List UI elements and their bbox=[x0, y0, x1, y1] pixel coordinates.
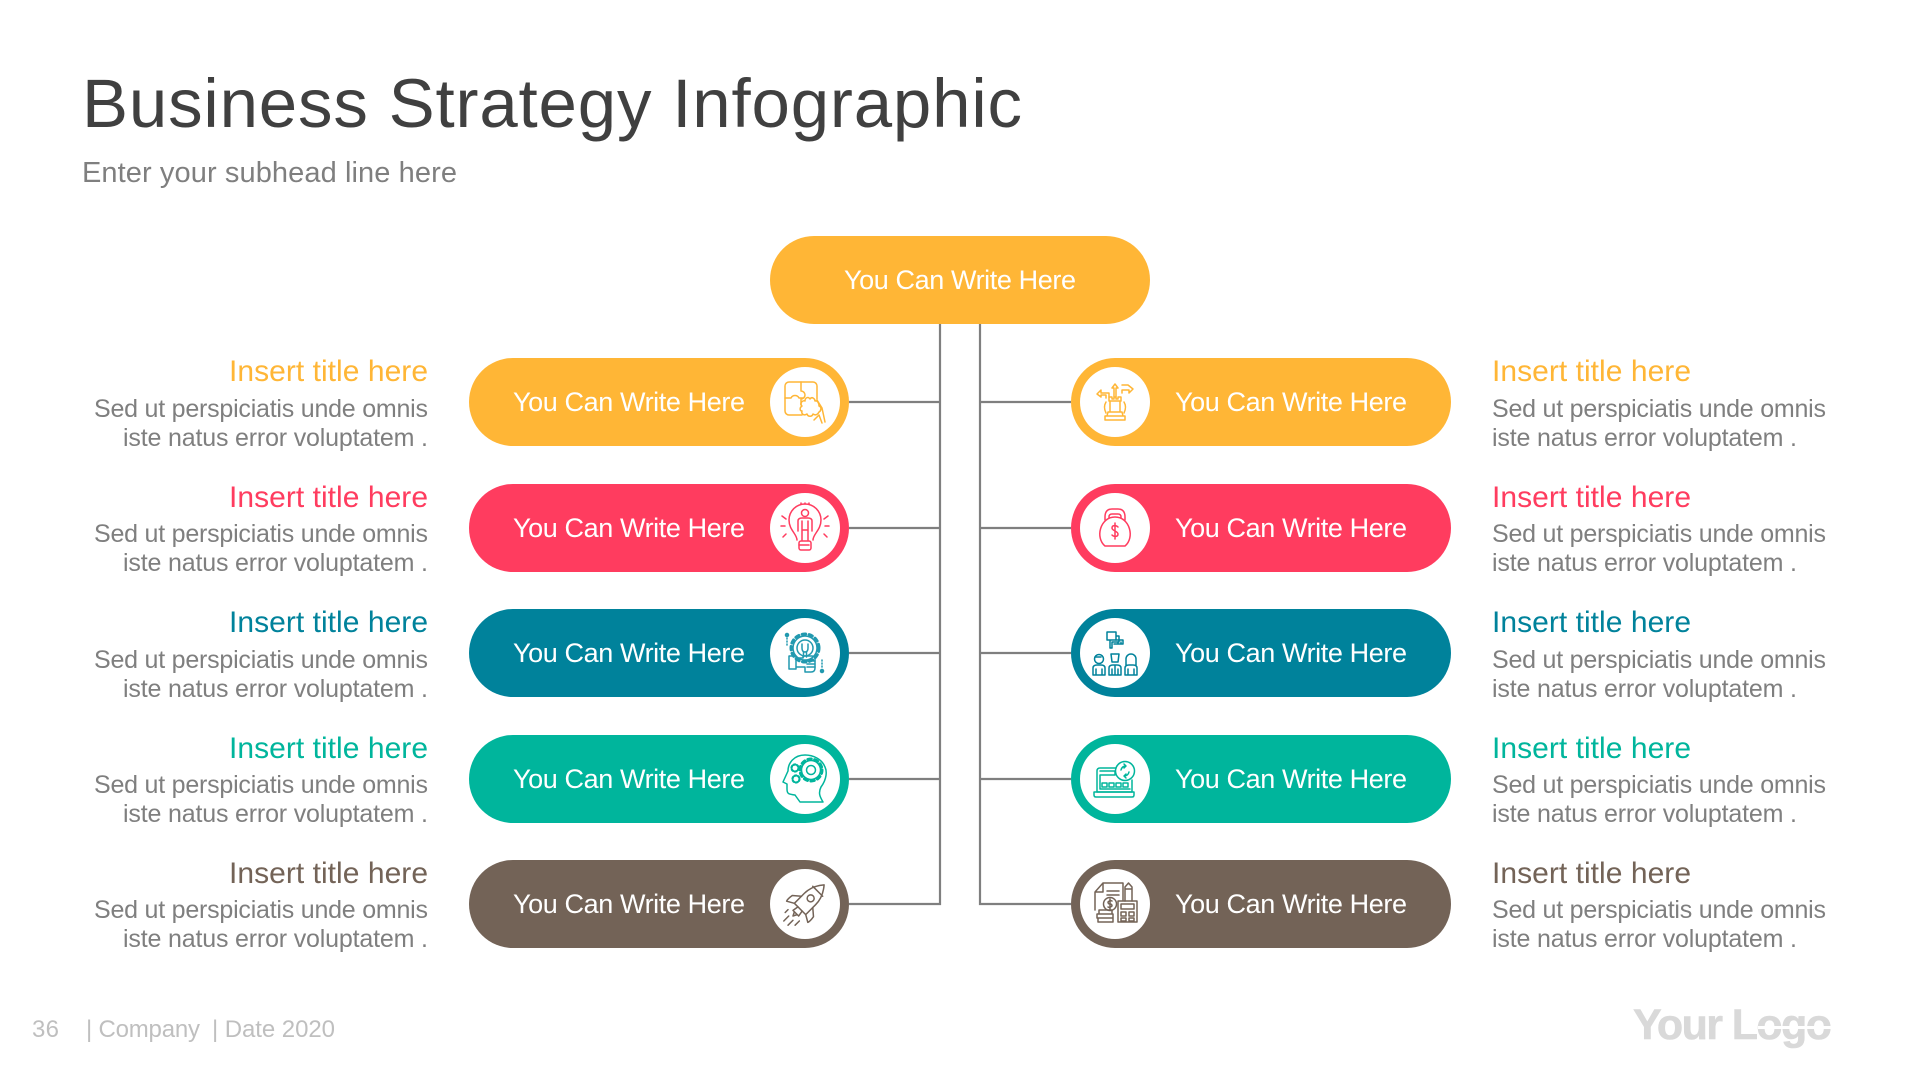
item description: iste natus error voluptatem . bbox=[1492, 424, 1797, 452]
item title: Insert title here bbox=[229, 481, 428, 514]
pill bbox=[469, 358, 849, 446]
item description: Sed ut perspiciatis unde omnis bbox=[1492, 646, 1826, 674]
pill bbox=[469, 735, 849, 823]
pill bbox=[1071, 484, 1451, 572]
icon: laptop with sync bbox=[1094, 762, 1134, 797]
footer: page number and company: 36 bbox=[32, 1016, 59, 1043]
item title: Insert title here bbox=[1492, 732, 1691, 765]
item description bbox=[94, 520, 428, 577]
top pill: You Can Write Here bbox=[844, 265, 1076, 295]
logo: Your Logo bbox=[1633, 1001, 1832, 1049]
item description: Sed ut perspiciatis unde omnis bbox=[94, 520, 428, 548]
pill bbox=[1071, 735, 1451, 823]
pill bbox=[469, 860, 849, 948]
left item 5: brown bbox=[94, 857, 849, 953]
item description bbox=[94, 395, 428, 452]
item description bbox=[94, 896, 428, 953]
pill: You Can Write Here bbox=[1175, 513, 1407, 543]
item title: Insert title here bbox=[1492, 857, 1691, 890]
item title: Insert title here bbox=[1492, 481, 1691, 514]
item description: iste natus error voluptatem . bbox=[123, 549, 428, 577]
icon: gear with wrench in hand bbox=[786, 634, 824, 672]
item description: Sed ut perspiciatis unde omnis bbox=[1492, 771, 1826, 799]
pill: You Can Write Here bbox=[513, 764, 745, 794]
item description bbox=[1492, 771, 1826, 828]
left item 3: teal bbox=[94, 606, 849, 703]
left item 2: red bbox=[94, 481, 849, 577]
item description bbox=[1492, 395, 1826, 452]
icon: chess rook with arrows bbox=[1097, 384, 1133, 420]
pill: You Can Write Here bbox=[513, 513, 745, 543]
pill: You Can Write Here bbox=[513, 638, 745, 668]
pill: You Can Write Here bbox=[513, 387, 745, 417]
item description bbox=[94, 771, 428, 828]
icon: document, coins and calculator bbox=[1095, 883, 1137, 922]
item description: iste natus error voluptatem . bbox=[1492, 800, 1797, 828]
item description: iste natus error voluptatem . bbox=[123, 424, 428, 452]
footer: page number and company: | Company bbox=[86, 1016, 200, 1043]
subhead: Enter your subhead line here bbox=[82, 157, 457, 189]
pill bbox=[1071, 860, 1451, 948]
pill bbox=[469, 609, 849, 697]
item description: Sed ut perspiciatis unde omnis bbox=[94, 395, 428, 423]
pill: You Can Write Here bbox=[1175, 638, 1407, 668]
item title: Insert title here bbox=[1492, 606, 1691, 639]
footer: page number and company: | Date 2020 bbox=[212, 1016, 335, 1043]
left item 4: green bbox=[94, 732, 849, 828]
icon: team with paint roller bbox=[1093, 632, 1137, 675]
item description: iste natus error voluptatem . bbox=[123, 675, 428, 703]
right item 2: red bbox=[1071, 481, 1826, 577]
icon: rocket bbox=[775, 874, 835, 934]
footer: page number and company bbox=[32, 1016, 335, 1043]
item title: Insert title here bbox=[229, 857, 428, 890]
right item 4: green bbox=[1071, 732, 1826, 828]
item title: Insert title here bbox=[229, 732, 428, 765]
title: Business Strategy Infographic bbox=[82, 65, 1022, 142]
item description bbox=[1492, 520, 1826, 577]
item description: Sed ut perspiciatis unde omnis bbox=[94, 646, 428, 674]
right item 5: brown bbox=[1071, 857, 1826, 953]
right item 1: yellow bbox=[1071, 355, 1826, 452]
icon: kettlebell with dollar sign bbox=[1100, 509, 1130, 546]
item description: Sed ut perspiciatis unde omnis bbox=[1492, 395, 1826, 423]
item description: Sed ut perspiciatis unde omnis bbox=[94, 896, 428, 924]
connector lines bbox=[849, 324, 1071, 904]
pill: You Can Write Here bbox=[513, 889, 745, 919]
pill bbox=[1071, 358, 1451, 446]
right item 3: teal bbox=[1071, 606, 1826, 703]
pill: You Can Write Here bbox=[1175, 387, 1407, 417]
item description: Sed ut perspiciatis unde omnis bbox=[1492, 520, 1826, 548]
item title: Insert title here bbox=[1492, 355, 1691, 388]
icon: puzzle and hand bbox=[785, 382, 825, 423]
item title: Insert title here bbox=[229, 606, 428, 639]
item description: Sed ut perspiciatis unde omnis bbox=[94, 771, 428, 799]
item description bbox=[1492, 896, 1826, 953]
item title: Insert title here bbox=[229, 355, 428, 388]
item description bbox=[94, 646, 428, 703]
left item 1: yellow bbox=[94, 355, 849, 452]
pill bbox=[469, 484, 849, 572]
item description: iste natus error voluptatem . bbox=[1492, 925, 1797, 953]
item description: Sed ut perspiciatis unde omnis bbox=[1492, 896, 1826, 924]
item description: iste natus error voluptatem . bbox=[123, 800, 428, 828]
pill bbox=[1071, 609, 1451, 697]
top pill bbox=[770, 236, 1150, 324]
item description bbox=[1492, 646, 1826, 703]
icon: light bulb with person bbox=[781, 503, 829, 550]
pill: You Can Write Here bbox=[1175, 889, 1407, 919]
icon: head with gears bbox=[783, 755, 826, 802]
item description: iste natus error voluptatem . bbox=[123, 925, 428, 953]
item description: iste natus error voluptatem . bbox=[1492, 675, 1797, 703]
pill: You Can Write Here bbox=[1175, 764, 1407, 794]
item description: iste natus error voluptatem . bbox=[1492, 549, 1797, 577]
